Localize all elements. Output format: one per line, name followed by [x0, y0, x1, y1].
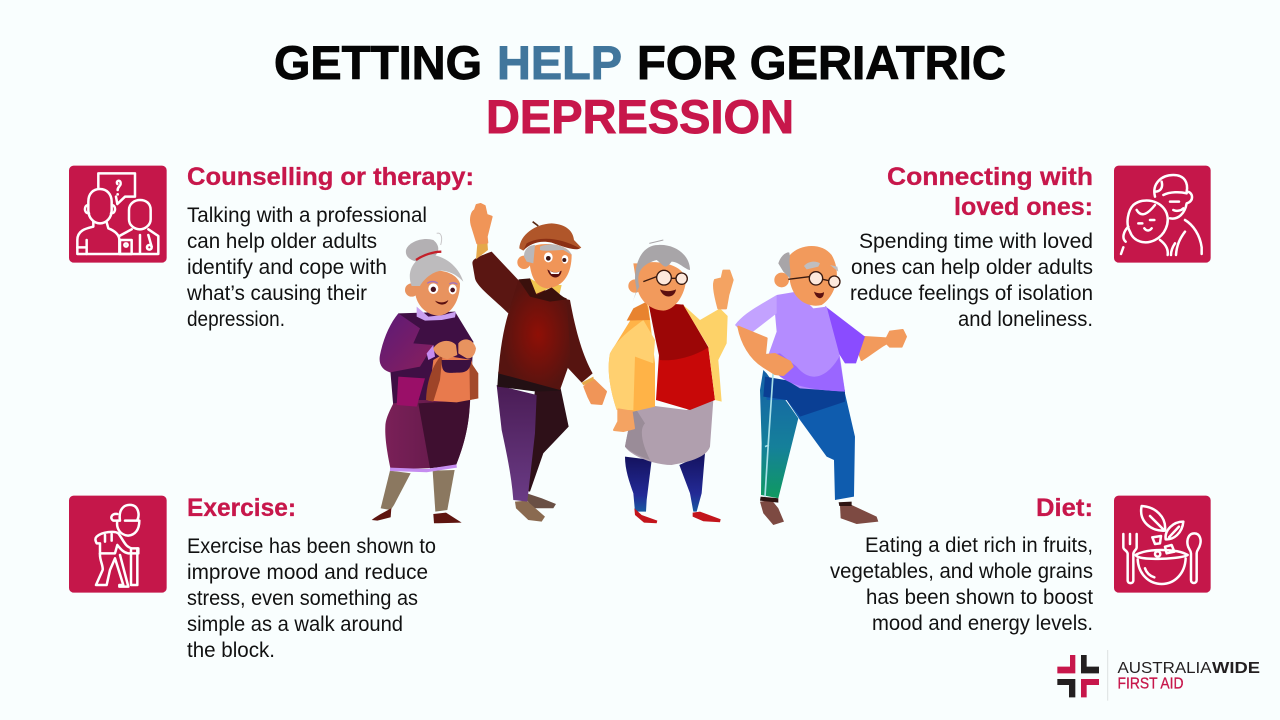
illustration: elderly man waving in brown sweater — [471, 204, 606, 522]
text: connecting description: and loneliness. — [958, 308, 1093, 331]
text: counselling description: what’s causing their — [186, 282, 367, 305]
title: DEPRESSION — [486, 90, 794, 143]
text: counselling description: depression. — [187, 308, 285, 331]
logo wordmark — [1118, 660, 1260, 692]
heading: exercise: Exercise: — [187, 494, 296, 522]
text: exercise description: improve mood and reduce — [187, 561, 428, 584]
icon: embracing elderly couple — [1114, 166, 1211, 263]
text: diet description: has been shown to boost — [866, 586, 1093, 609]
text: counselling description — [186, 204, 427, 331]
icon: elderly person walking with cane — [69, 496, 167, 593]
panel: counselling or therapy — [69, 163, 474, 331]
illustration: elderly man in lavender shirt and blue trousers — [735, 246, 906, 525]
logo wordmark: FIRST AID — [1118, 676, 1184, 692]
illustration: elderly woman in yellow cardigan — [609, 240, 733, 523]
text: counselling description: Talking with a professional — [187, 204, 427, 227]
icon: counsellor and patient — [69, 166, 167, 263]
text: connecting description: ones can help older adults — [851, 256, 1093, 279]
logo mark: cross — [1057, 650, 1108, 701]
illustration: elderly woman in purple with handbag — [372, 233, 478, 523]
text: connecting description: Spending time with loved — [859, 230, 1093, 253]
panel: connecting with loved ones — [850, 163, 1211, 331]
logo: Australia Wide First Aid — [1057, 650, 1260, 701]
panel: exercise — [69, 494, 436, 662]
title: FOR GERIATRIC — [637, 36, 1006, 89]
text: diet description: mood and energy levels. — [872, 612, 1093, 635]
text: exercise description: Exercise has been shown to — [187, 535, 436, 558]
heading: connecting with loved ones: Connecting with — [887, 163, 1093, 191]
title: GETTING — [274, 36, 482, 89]
text: counselling description: identify and cope with — [187, 256, 387, 279]
logo wordmark: AUSTRALIA — [1118, 660, 1212, 677]
panel: diet — [830, 494, 1211, 635]
heading: connecting with loved ones: loved ones: — [954, 193, 1093, 221]
text: diet description: Eating a diet rich in fruits, — [865, 534, 1093, 557]
text: diet description: vegetables, and whole grains — [830, 560, 1093, 583]
text: connecting description — [850, 230, 1093, 331]
text: exercise description: simple as a walk around — [187, 613, 403, 636]
heading: connecting with loved ones — [887, 163, 1093, 221]
text: diet description — [830, 534, 1093, 635]
title: HELP — [497, 36, 622, 89]
heading: diet: Diet: — [1036, 494, 1093, 522]
text: connecting description: reduce feelings of isolation — [850, 282, 1093, 305]
title — [274, 36, 1006, 143]
text: exercise description: the block. — [187, 639, 275, 662]
heading: counselling or therapy: Counselling or therapy: — [187, 163, 474, 191]
icon: salad bowl with fork and spoon — [1114, 496, 1211, 593]
text: exercise description — [187, 535, 436, 662]
text: exercise description: stress, even something as — [187, 587, 418, 610]
text: counselling description: can help older adults — [187, 230, 377, 253]
logo wordmark: WIDE — [1212, 660, 1260, 677]
